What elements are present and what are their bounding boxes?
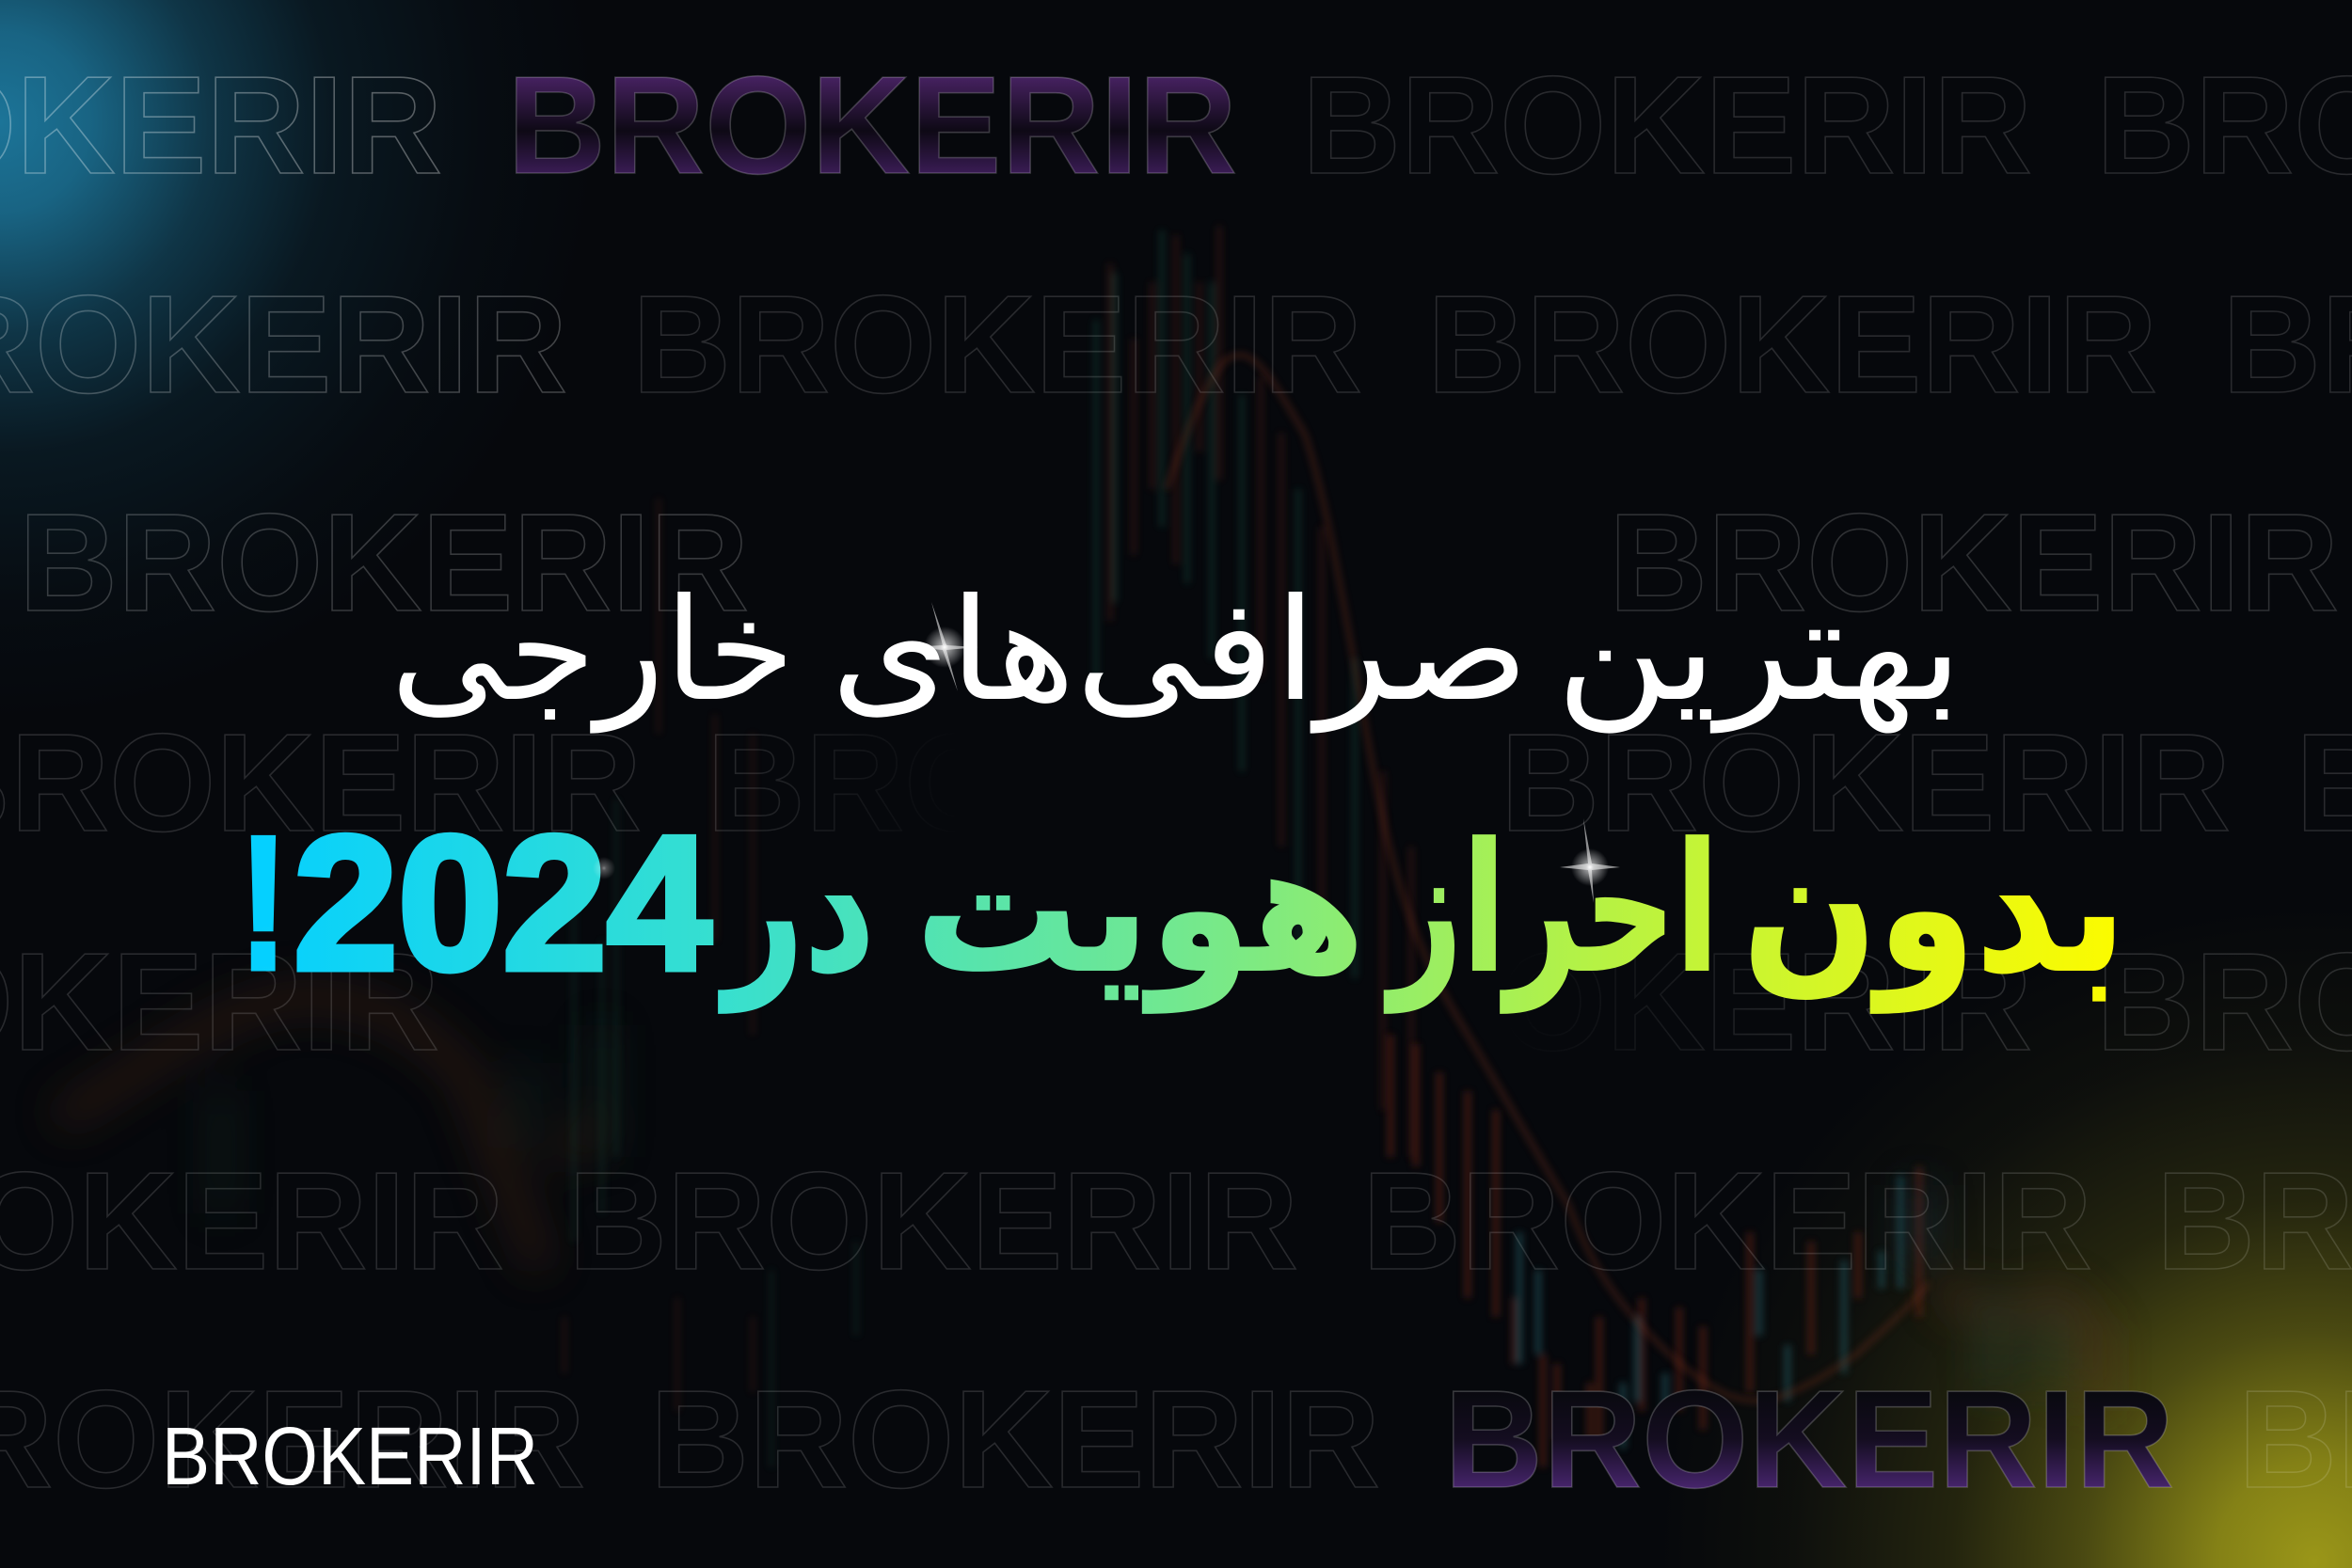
title line 1: word 1: بهترین bbox=[1556, 569, 1963, 734]
watermark row 6: BROKERIR bbox=[568, 1144, 1298, 1299]
watermark row 3: BROKERIR bbox=[19, 485, 749, 641]
title line 2: word احراز: احراز bbox=[1384, 806, 1719, 1013]
title line 2: year: 2024 bbox=[294, 797, 711, 1010]
title line 1: word 2: صرافی‌های bbox=[831, 569, 1529, 734]
title line 2: word بدون: بدون bbox=[1742, 806, 2126, 1014]
blue corner glow bbox=[0, 0, 659, 734]
watermark row 7: BROKERIR bbox=[650, 1362, 1380, 1517]
brand label: BROKERIR bbox=[162, 1411, 538, 1502]
watermark row 1 bbox=[0, 48, 2352, 203]
watermark row 7: BROKERIR bbox=[1444, 1362, 2174, 1517]
watermark row 4: BROKERIR bbox=[707, 705, 1437, 861]
watermark row 2: BROKERIR bbox=[1427, 267, 2157, 422]
watermark row 4 bbox=[0, 705, 2352, 861]
title line 2 bbox=[239, 797, 2126, 1014]
sparkle: year bbox=[593, 857, 615, 879]
watermark row 6: BROKERIR bbox=[1362, 1144, 2092, 1299]
watermark row 3 bbox=[19, 485, 2339, 641]
chart: faint mid candles bbox=[564, 499, 856, 1467]
title line 2: word در: در bbox=[719, 806, 875, 1013]
watermark row 6 bbox=[0, 1144, 2352, 1299]
yellow corner glow bbox=[1656, 903, 2352, 1568]
chart: descending candles and lower cluster bbox=[1391, 1035, 1919, 1467]
chart: blurred right cluster bbox=[1919, 1185, 2098, 1411]
watermark row 5: BROKERIR bbox=[1302, 925, 2032, 1080]
chart: moving average curve bbox=[1167, 355, 1929, 1401]
title line 1 bbox=[390, 569, 1963, 734]
blurred candlestick chart bbox=[56, 226, 2098, 1467]
sparkle: title line 1 bbox=[911, 602, 978, 691]
watermark row 3: BROKERIR bbox=[1609, 485, 2339, 641]
title line 2: exclamation mark: ! bbox=[239, 797, 288, 1010]
watermark row 4: BROKERIR bbox=[1501, 705, 2231, 861]
title line 2: word هویت: هویت bbox=[915, 806, 1365, 1013]
watermark row 1: BROKERIR bbox=[507, 48, 1237, 203]
watermark row 2 bbox=[0, 267, 2352, 422]
chart: upper peak candles bbox=[1096, 226, 1411, 1157]
title line 1: word 3: خارجی bbox=[390, 569, 795, 734]
chart: blurred left cluster bbox=[56, 997, 602, 1270]
sparkle: title line 2 bbox=[1560, 818, 1620, 903]
watermark row 5 bbox=[0, 925, 2352, 1080]
watermark row 7 bbox=[0, 1362, 2352, 1517]
watermark row 2: BROKERIR bbox=[632, 267, 1362, 422]
watermark row 1: BROKERIR bbox=[1302, 48, 2032, 203]
